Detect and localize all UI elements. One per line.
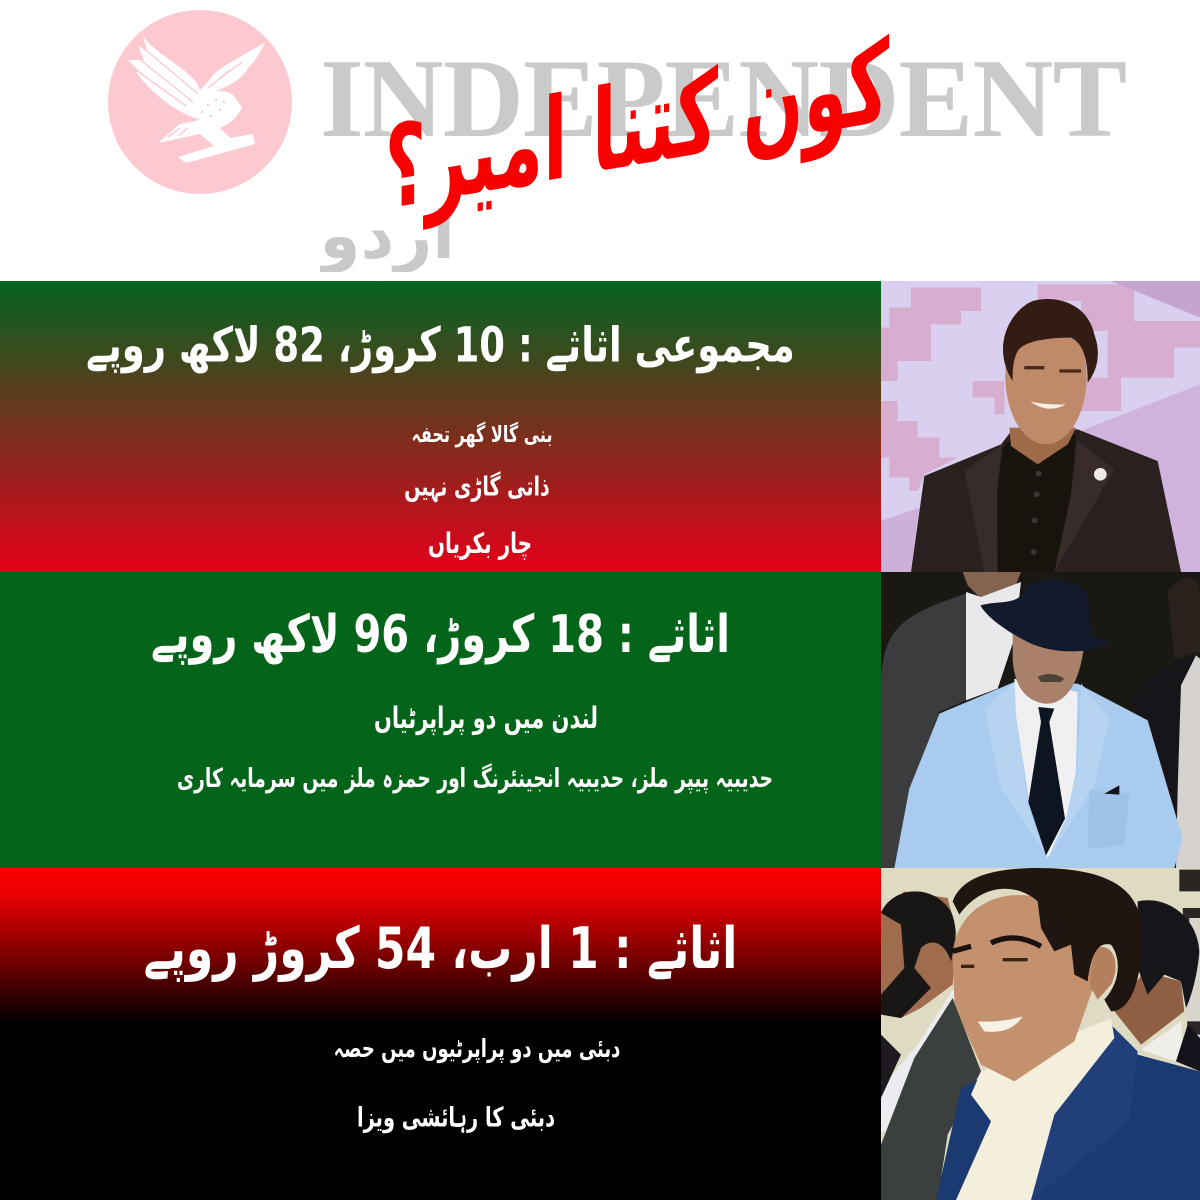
jacket (936, 1025, 1200, 1200)
suit (911, 429, 1181, 572)
left man (881, 891, 956, 1018)
panel: Bilawal Bhutto assets (0, 868, 881, 1200)
icon: eagle roundel (108, 10, 292, 194)
heading: assets: اثاثے : 18 کروڑ، 96 لاکھ روپے (151, 605, 730, 665)
text block: asset details: ذاتی گاڑی نہیں (404, 472, 550, 502)
text block: asset details: دبئی کا رہائشی ویزا (357, 1101, 555, 1133)
text block: asset details: بنی گالا گھر تحفہ (412, 421, 552, 448)
photo: Shehbaz Sharif (881, 572, 1200, 868)
panel: Imran Khan assets (0, 281, 881, 572)
text block: asset details (404, 421, 552, 560)
text block: asset details (334, 1035, 620, 1134)
heading: assets: اثاثے : 1 ارب، 54 کروڑ روپے (144, 916, 737, 982)
title: کون کتنا امیر؟ (385, 14, 889, 236)
text block: asset details: لندن میں دو پراپرٹیاں (374, 701, 598, 735)
panel: Shehbaz Sharif assets (0, 572, 881, 868)
photo: Imran Khan (881, 281, 1200, 572)
text block: asset details: دبئی میں دو پراپرٹیوں میں حصہ (334, 1035, 620, 1064)
text block: asset details: حدیبیہ پیپر ملز، حدیبیہ انجینئرنگ اور حمزہ ملز میں سرمایہ کاری (177, 765, 773, 794)
wordmark: INDEPENDENT: INDEPENDENT (320, 37, 1126, 161)
face (953, 895, 1094, 1081)
right man (1114, 971, 1184, 1045)
heading: total assets: مجموعی اثاثے : 10 کروڑ، 82 لاکھ روپے (86, 317, 795, 373)
text block: asset details (177, 701, 773, 794)
photo: Bilawal Bhutto (881, 868, 1200, 1200)
text block: asset details: چار بکریاں (428, 526, 532, 560)
logo: Independent Urdu watermark (108, 10, 1126, 272)
